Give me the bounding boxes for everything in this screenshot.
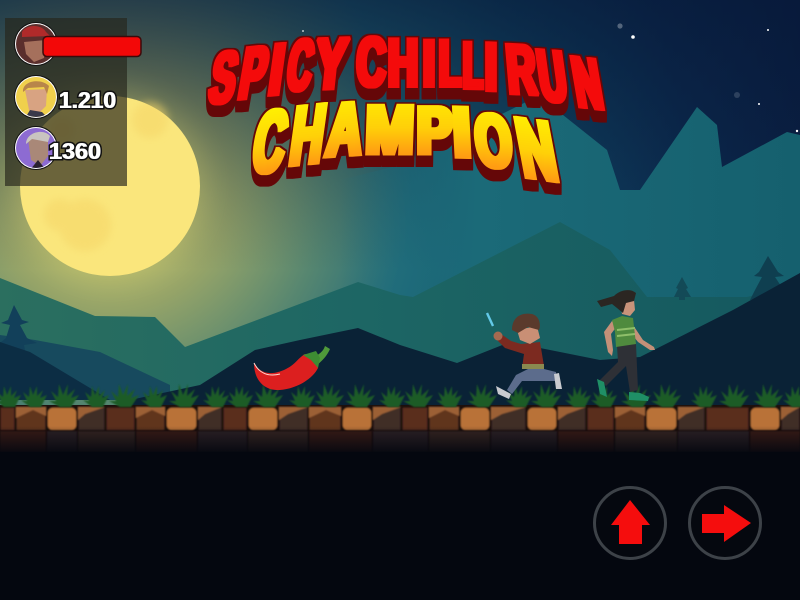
middle mountains: [0, 222, 800, 400]
title line 2: A: [323, 87, 367, 172]
boy torso: [497, 334, 544, 368]
moon: [16, 92, 204, 280]
near dark hills: [130, 273, 800, 410]
title line 1: R: [503, 29, 539, 110]
girl hair: [597, 290, 636, 313]
running boy: [487, 313, 562, 399]
soil top row: [0, 407, 800, 431]
title line 1: C: [283, 24, 318, 107]
grass tufts: [0, 384, 800, 407]
title line 1: P: [234, 30, 273, 115]
stars: [302, 23, 798, 216]
title line 1: I: [423, 26, 435, 100]
tree: right: [750, 256, 790, 300]
title line 2: P: [417, 93, 452, 167]
title line 1: N: [567, 42, 608, 125]
boy legs: [507, 366, 556, 394]
boy hand: [494, 332, 502, 340]
player 2 score: 1.210: [59, 87, 116, 113]
jump button: [594, 488, 666, 558]
up arrow icon: [611, 500, 650, 544]
girl face: [620, 300, 635, 316]
girl arms: [604, 321, 655, 356]
near left dark hill: [0, 342, 110, 400]
title line 1: L: [463, 28, 483, 102]
player 1 health bar: [43, 36, 141, 56]
player 3 avatar: [14, 126, 58, 170]
girl shoes: [597, 379, 649, 401]
title line 2: C: [247, 90, 293, 193]
title line 1: I: [265, 29, 289, 111]
title line 2: O: [471, 97, 516, 184]
player 2 avatar: [14, 75, 58, 120]
title line 2: M: [364, 92, 415, 168]
move right button: [690, 488, 760, 558]
title line 1: U: [533, 35, 571, 118]
right arrow icon: [702, 505, 751, 542]
player 3 score: 1360: [49, 138, 101, 164]
running girl: [597, 290, 655, 401]
girl top: [612, 316, 636, 347]
title line 1: [204, 23, 608, 125]
title line 2: [247, 87, 563, 199]
player list panel: [5, 18, 141, 186]
soil ground: [0, 405, 800, 455]
title line 1: S: [204, 35, 243, 120]
title line 1: H: [388, 25, 418, 101]
girl legs: [600, 344, 638, 392]
title line 2: H: [286, 87, 330, 183]
far left blue hill: [0, 335, 170, 400]
chilli pepper: [254, 346, 330, 390]
back mountains: [340, 100, 800, 400]
title line 1: Y: [311, 24, 351, 105]
title line 2: N: [510, 100, 563, 199]
title line 2: I: [451, 93, 473, 172]
tree: left: [0, 305, 37, 400]
knife: [487, 313, 493, 326]
title line 1: I: [485, 29, 497, 105]
boy shoes: [496, 373, 562, 399]
soil bottom row: [0, 431, 800, 452]
boy hat: [512, 314, 540, 333]
tree: small middle: [674, 277, 691, 300]
player 1 avatar: [14, 22, 58, 66]
boy face: [517, 326, 540, 344]
title: [204, 23, 608, 199]
dark underground: [0, 452, 800, 600]
title line 1: L: [439, 26, 461, 100]
title line 1: C: [355, 23, 387, 101]
